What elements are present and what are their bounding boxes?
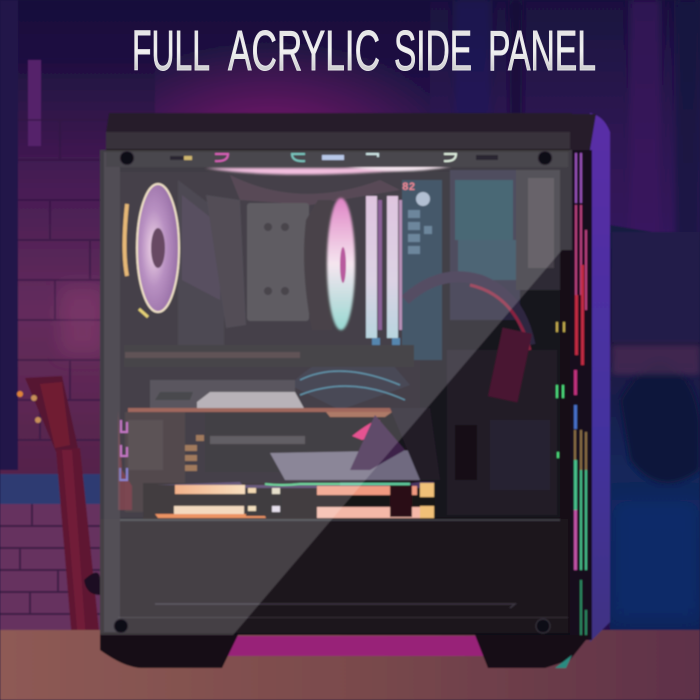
debug LED: 82 xyxy=(402,182,415,194)
table xyxy=(0,630,700,700)
case feet xyxy=(100,635,590,668)
thumb screws xyxy=(114,151,552,633)
motherboard dark area xyxy=(120,172,420,517)
RAM sticks xyxy=(366,196,402,350)
cable arc xyxy=(405,277,530,345)
cable tangle top xyxy=(230,175,400,205)
left frame of acrylic panel xyxy=(104,152,120,632)
cooler fan right xyxy=(327,198,355,330)
top radiators strip xyxy=(205,166,452,175)
case front mesh strip xyxy=(568,114,596,640)
cable bundle lower xyxy=(488,328,532,402)
LED mesh strip dots xyxy=(574,153,587,635)
title: ACRYLIC xyxy=(228,19,380,83)
case interior xyxy=(100,150,570,635)
lower board and GPU backplate xyxy=(118,345,440,512)
right bay xyxy=(450,170,520,320)
case top panel xyxy=(106,113,572,152)
guitar xyxy=(17,376,100,640)
GPU fans bottom xyxy=(143,482,435,519)
title: FULL xyxy=(132,19,210,83)
VRM and board strip xyxy=(402,180,442,360)
table glow xyxy=(225,636,490,656)
title: SIDE xyxy=(394,19,472,83)
cooler fan ring left xyxy=(137,184,179,312)
PSU shroud xyxy=(100,519,570,635)
CPU cooler xyxy=(124,180,355,350)
brick wall xyxy=(0,0,155,664)
ROG logo xyxy=(352,420,380,440)
monitor xyxy=(610,225,700,630)
title xyxy=(132,19,596,83)
top bar inside panel xyxy=(106,152,568,167)
title: PANEL xyxy=(488,19,596,83)
yellow connector xyxy=(557,322,564,332)
side purple panel xyxy=(590,113,610,642)
small green LEDs xyxy=(557,385,563,458)
acrylic reflection overlay xyxy=(100,150,572,635)
